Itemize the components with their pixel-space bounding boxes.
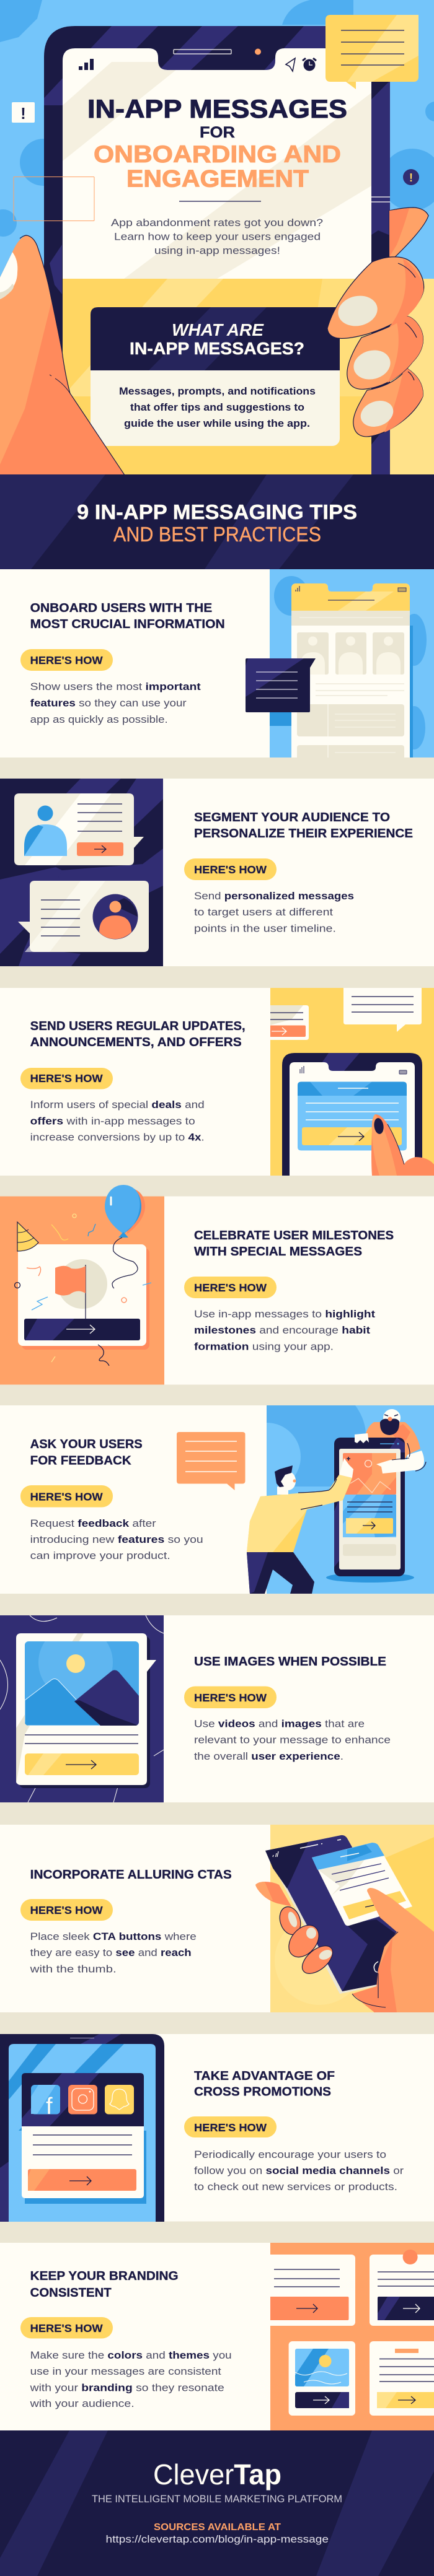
panel text xyxy=(119,386,316,429)
tip text: use in your messages are consistent xyxy=(30,2365,221,2377)
tip text: Make sure the colors and themes you xyxy=(30,2349,232,2361)
hero section xyxy=(0,0,434,475)
here's how pill: HERE'S HOW xyxy=(30,1072,103,1085)
tip heading: FOR FEEDBACK xyxy=(30,1454,131,1468)
tip text: points in the user timeline. xyxy=(194,923,336,934)
panel: tip 3 xyxy=(0,988,434,1176)
tip text: to check out new services or products. xyxy=(194,2181,397,2193)
panel: tip 1 xyxy=(0,569,434,764)
tip text: to target users at different xyxy=(194,906,333,918)
illustration: celebration xyxy=(0,1185,164,1385)
here's how pill xyxy=(20,1068,113,1089)
tip text: Inform users of special deals and xyxy=(30,1099,205,1111)
tip text: formation using your app. xyxy=(194,1341,334,1353)
fingers front xyxy=(279,1906,334,1974)
tip text: Use videos and images that are xyxy=(194,1718,365,1730)
tip text: introducing new features so you xyxy=(30,1534,203,1545)
tip heading: SEND USERS REGULAR UPDATES, xyxy=(30,1019,246,1033)
tip text xyxy=(29,1931,197,1975)
tip heading: CROSS PROMOTIONS xyxy=(194,2085,331,2098)
icon: balloon xyxy=(105,1185,145,1288)
icon: exclamation box xyxy=(12,102,35,123)
illustration: offer on phone xyxy=(267,988,434,1176)
tip text: follow you on social media channels or xyxy=(194,2165,404,2177)
panel text: that offer tips and suggestions to xyxy=(130,402,304,413)
icon: exclamation circle: ! xyxy=(409,172,413,184)
icon: exclamation circle xyxy=(403,169,419,185)
tip text: Request feedback after xyxy=(30,1517,156,1529)
card: image xyxy=(289,2341,355,2416)
tip text: they are easy to see and reach xyxy=(30,1947,192,1958)
here's how pill: HERE'S HOW xyxy=(30,654,103,666)
tip text xyxy=(30,681,201,725)
tilted phone xyxy=(270,1835,377,1994)
tip heading: ASK YOUR USERS xyxy=(30,1438,143,1451)
illustration: users giving feedback xyxy=(232,1405,434,1594)
tip text xyxy=(194,1308,375,1353)
card: navy button xyxy=(370,2250,434,2326)
sources: SOURCES AVAILABLE AT xyxy=(154,2522,281,2533)
tip text: milestones and encourage habit xyxy=(194,1324,370,1336)
here's how pill xyxy=(20,1485,113,1508)
here's how pill xyxy=(184,2116,277,2137)
confetti xyxy=(15,1214,151,1366)
message card xyxy=(18,1244,149,1350)
panel: tip 7 xyxy=(0,1825,434,2012)
card: orange button xyxy=(267,2255,355,2326)
message card xyxy=(312,1843,412,1926)
tip text xyxy=(194,2149,404,2193)
sources: https://clevertap.com/blog/in-app-message xyxy=(105,2533,329,2545)
here's how pill: HERE'S HOW xyxy=(194,863,267,876)
tip text: can improve your product. xyxy=(30,1550,170,1561)
tip text: the overall user experience . xyxy=(194,1750,343,1762)
panel: tip 6 xyxy=(0,1615,434,1802)
here's how pill xyxy=(184,858,277,880)
panel text: Messages, prompts, and notifications xyxy=(119,386,316,397)
illustration: app onboarding screen xyxy=(270,569,434,764)
panel: tip 4 xyxy=(0,1185,434,1385)
tip heading: SEGMENT YOUR AUDIENCE TO xyxy=(194,811,390,824)
panel heading: IN-APP MESSAGES? xyxy=(130,339,304,358)
panel: tip 2 xyxy=(0,779,434,966)
tip text xyxy=(30,2349,232,2409)
tip text: with your audience. xyxy=(30,2398,135,2409)
icon: facebook xyxy=(31,2085,60,2115)
here's how pill: HERE'S HOW xyxy=(194,1281,267,1294)
bald man xyxy=(366,1409,420,1463)
here's how pill xyxy=(20,1899,113,1921)
here's how pill: HERE'S HOW xyxy=(194,1692,267,1704)
section title: 9 IN-APP MESSAGING TIPS xyxy=(77,500,357,523)
phone xyxy=(282,1053,422,1176)
tip heading: KEEP YOUR BRANDING xyxy=(30,2269,179,2283)
logo: CleverTap: CleverTap xyxy=(153,2458,281,2491)
tip heading: PERSONALIZE THEIR EXPERIENCE xyxy=(194,827,413,840)
pointing finger xyxy=(371,1114,434,1176)
here's how pill xyxy=(184,1686,277,1708)
hand: left thumb xyxy=(0,235,125,475)
intro text: using in-app messages! xyxy=(154,245,280,256)
tip text xyxy=(194,890,354,934)
tip text: with your branding so they resonate xyxy=(30,2382,224,2393)
title: FOR xyxy=(200,124,235,141)
tip text xyxy=(194,1718,391,1762)
intro text: Learn how to keep your users engaged xyxy=(114,230,321,243)
here's how pill: HERE'S HOW xyxy=(30,1490,103,1503)
title: ENGAGEMENT xyxy=(126,166,309,192)
illustration: social cross promotion xyxy=(0,2034,164,2222)
tip heading xyxy=(30,601,225,631)
tip text: Use in-app messages to highlight xyxy=(194,1308,375,1320)
tagline: THE INTELLIGENT MOBILE MARKETING PLATFORM xyxy=(92,2493,342,2505)
here's how pill xyxy=(20,649,113,671)
title: IN-APP MESSAGES xyxy=(87,94,347,123)
footer xyxy=(0,2430,434,2576)
tip heading: MOST CRUCIAL INFORMATION xyxy=(30,618,225,631)
icon: exclamation box: ! xyxy=(20,104,26,123)
young man xyxy=(247,1458,353,1594)
tip text: Periodically encourage your users to xyxy=(194,2149,386,2160)
card: yellow button xyxy=(370,2341,434,2416)
bald man hands xyxy=(355,1433,426,1474)
tip heading xyxy=(30,1438,143,1468)
tip text: Send personalized messages xyxy=(194,890,354,902)
illustration: hand holding phone xyxy=(255,1825,434,2012)
tip text xyxy=(30,1517,203,1561)
title xyxy=(87,94,347,192)
title: ONBOARDING AND xyxy=(94,141,341,168)
hand: right fingers xyxy=(327,207,428,437)
orange speech bubble xyxy=(177,1432,246,1490)
tip heading: INCORPORATE ALLURING CTAS xyxy=(30,1868,232,1882)
phone body xyxy=(37,26,390,475)
illustration: image message xyxy=(0,1615,164,1802)
panel heading xyxy=(130,320,304,358)
section header xyxy=(0,474,434,569)
message card: bottom xyxy=(18,881,149,952)
finger behind phone xyxy=(255,1882,291,1906)
navy speech bubble xyxy=(246,658,316,712)
tip text: Place sleek CTA buttons where xyxy=(30,1931,197,1942)
icon: instagram xyxy=(68,2085,97,2115)
tip heading xyxy=(30,1019,246,1049)
sources xyxy=(105,2522,329,2545)
panel: tip 5 xyxy=(0,1405,434,1594)
tip text: with the thumb. xyxy=(29,1963,117,1975)
white speech bubble xyxy=(343,988,422,1032)
icon: facebook: f xyxy=(46,2094,53,2120)
panel: tip 8 xyxy=(0,2034,434,2222)
panel text: guide the user while using the app. xyxy=(124,418,310,429)
icon: snapchat xyxy=(105,2085,134,2115)
here's how pill: HERE'S HOW xyxy=(30,2322,103,2334)
icon: alarm clock xyxy=(303,58,316,71)
panel: tip 9 xyxy=(0,2243,434,2430)
tip text: relevant to your message to enhance xyxy=(194,1734,391,1746)
intro text xyxy=(111,217,323,256)
thumb xyxy=(367,1888,434,2012)
image card xyxy=(16,1625,156,1785)
tip text: features so they can use your xyxy=(30,697,187,709)
feedback phone xyxy=(334,1438,405,1576)
icon: navigation arrow xyxy=(286,58,295,71)
here's how pill xyxy=(20,2317,113,2339)
tip heading: CONSISTENT xyxy=(30,2286,112,2300)
tip text: Show users the most important xyxy=(30,681,201,692)
panel: what are in-app messages xyxy=(91,307,340,446)
intro text: App abandonment rates got you down? xyxy=(111,217,323,229)
tip heading xyxy=(30,2269,179,2300)
tip heading: ONBOARD USERS WITH THE xyxy=(30,601,212,615)
yellow speech bubble xyxy=(326,15,418,89)
illustration: personalized messages xyxy=(0,779,163,966)
here's how pill xyxy=(184,1277,277,1298)
tip heading: USE IMAGES WHEN POSSIBLE xyxy=(194,1655,386,1669)
tip text: app as quickly as possible. xyxy=(30,714,168,725)
panel heading: WHAT ARE xyxy=(172,320,264,339)
tip heading xyxy=(194,2069,335,2098)
tip heading xyxy=(194,811,413,840)
tip heading: ANNOUNCEMENTS, AND OFFERS xyxy=(30,1036,242,1049)
here's how pill: HERE'S HOW xyxy=(194,2121,267,2134)
illustration: branded message cards xyxy=(267,2243,434,2430)
section title: AND BEST PRACTICES xyxy=(113,523,321,546)
small offer card xyxy=(267,1005,309,1040)
tip heading: WITH SPECIAL MESSAGES xyxy=(194,1245,362,1259)
tip text xyxy=(30,1099,205,1143)
icon: signal bars xyxy=(79,59,94,70)
message card: top xyxy=(14,793,144,865)
icon: party hat xyxy=(17,1222,38,1251)
here's how pill: HERE'S HOW xyxy=(30,1904,103,1916)
tip heading: CELEBRATE USER MILESTONES xyxy=(194,1229,394,1242)
tip text: increase conversions by up to 4x. xyxy=(30,1132,205,1143)
section title xyxy=(77,500,357,546)
tip heading: TAKE ADVANTAGE OF xyxy=(194,2069,335,2083)
tip heading xyxy=(194,1229,394,1259)
message card xyxy=(22,2073,144,2198)
tip text: offers with in-app messages to xyxy=(30,1115,195,1127)
